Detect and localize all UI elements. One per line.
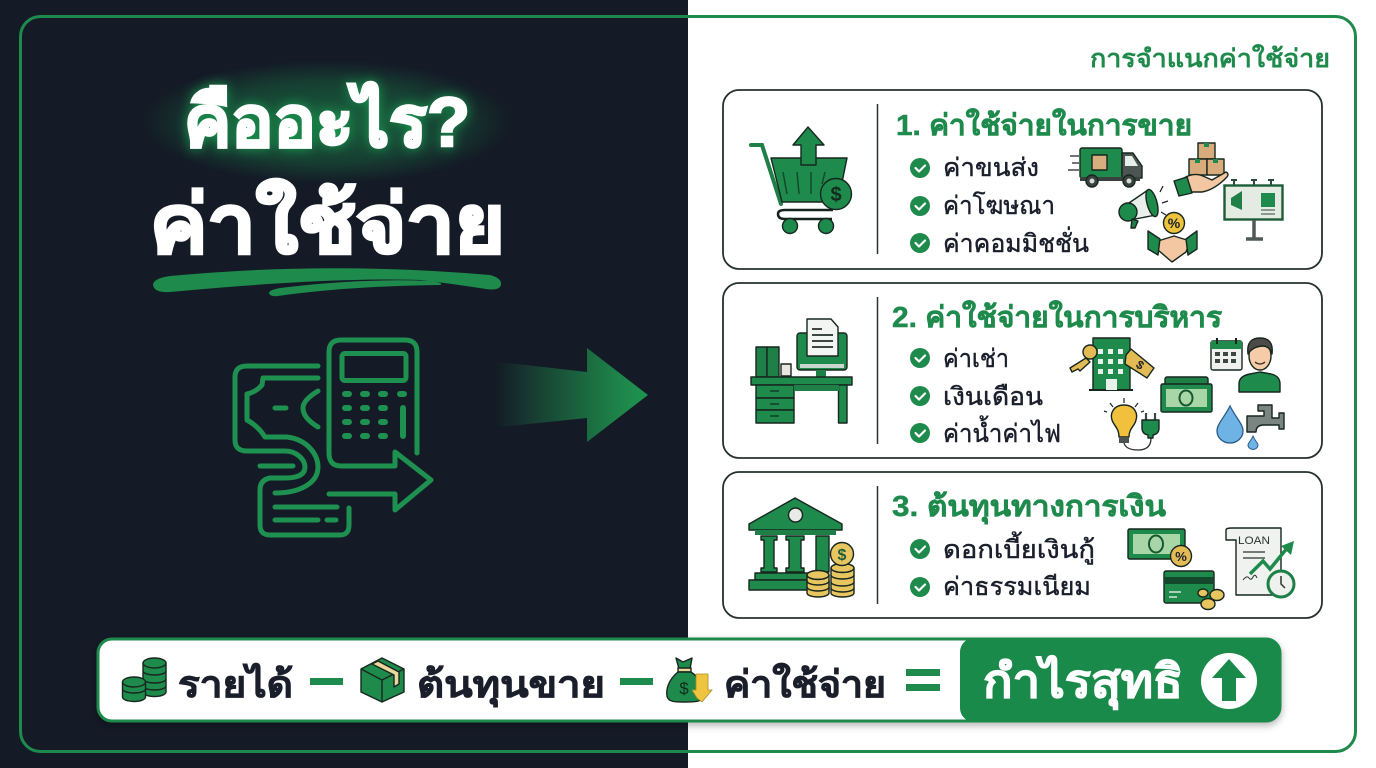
list: section 2 items bbox=[910, 345, 1061, 448]
panel: formula bar bbox=[98, 638, 1280, 722]
icon: credit card with coins bbox=[1164, 571, 1224, 610]
term: cost of sales: ต้นทุนขาย bbox=[417, 664, 605, 708]
icon: loan document bbox=[1226, 528, 1294, 597]
result box: net profit bbox=[960, 638, 1280, 722]
list: section 1 items: ค่าขนส่ง bbox=[943, 154, 1039, 182]
result text: กำไรสุทธิ bbox=[983, 655, 1183, 710]
icon: banknotes bbox=[1161, 377, 1212, 412]
icon: shopping cart bbox=[751, 127, 852, 234]
icon: loan document: LOAN bbox=[1238, 535, 1270, 547]
icon: shopping cart: $ bbox=[830, 184, 842, 206]
term: expenses: ค่าใช้จ่าย bbox=[724, 662, 886, 705]
brush underline bbox=[153, 268, 501, 296]
list: section 1 items: ค่าคอมมิชชั่น bbox=[943, 226, 1089, 258]
panel: financial costs bbox=[723, 472, 1322, 618]
icon: money bag bbox=[667, 658, 712, 702]
title line 2: ค่าใช้จ่าย bbox=[150, 178, 505, 269]
icon: bank with coins bbox=[749, 498, 854, 597]
big arrow bbox=[490, 348, 648, 442]
icon: up arrow circle bbox=[1201, 653, 1257, 709]
icon: office desk bbox=[751, 319, 852, 423]
icon: coin stacks bbox=[122, 658, 166, 702]
panel: administrative expenses bbox=[723, 283, 1322, 458]
icon: cardboard box bbox=[361, 658, 404, 702]
icon: megaphone bbox=[1119, 186, 1168, 228]
term: revenue: รายได้ bbox=[178, 662, 293, 705]
list: section 1 items bbox=[910, 154, 1089, 258]
heading: section 3: 3. ต้นทุนทางการเงิน bbox=[892, 491, 1166, 524]
list: section 3 items: ค่าธรรมเนียม bbox=[943, 573, 1091, 601]
icon: banknote with percent: % bbox=[1175, 549, 1187, 564]
icon: hand with boxes bbox=[1174, 143, 1228, 196]
list: section 3 items: ดอกเบี้ยเงินกู้ bbox=[943, 531, 1095, 565]
icon: water and faucet bbox=[1217, 405, 1284, 450]
icon: bank with coins: $ bbox=[838, 547, 847, 564]
white right background bbox=[688, 0, 1376, 768]
list: section 2 items: ค่าน้ำค่าไฟ bbox=[943, 415, 1061, 448]
equals sign bbox=[906, 669, 940, 691]
icon: building with key and tag bbox=[1070, 338, 1154, 390]
dark left background bbox=[0, 0, 688, 768]
icon: handshake with percent: % bbox=[1168, 215, 1181, 231]
icon: building with key and tag: $ bbox=[1133, 357, 1147, 373]
heading: classification: การจำแนกค่าใช้จ่าย bbox=[1090, 43, 1330, 73]
icon: handshake with percent bbox=[1148, 212, 1197, 262]
list: section 2 items: ค่าเช่า bbox=[943, 345, 1009, 373]
icon: money bag: $ bbox=[679, 679, 689, 698]
list: section 1 items: ค่าโฆษณา bbox=[943, 191, 1055, 220]
minus sign bbox=[310, 678, 343, 685]
list: section 3 items bbox=[910, 531, 1095, 601]
minus sign bbox=[620, 678, 653, 685]
panel: selling expenses bbox=[723, 90, 1322, 269]
heading: section 1: 1. ค่าใช้จ่ายในการขาย bbox=[896, 108, 1192, 142]
title line 1: คืออะไร? bbox=[184, 81, 470, 161]
heading: section 2: 2. ค่าใช้จ่ายในการบริหาร bbox=[892, 300, 1222, 334]
title block bbox=[142, 60, 512, 296]
icon: banknote with percent bbox=[1128, 529, 1192, 566]
icon: employee bbox=[1239, 338, 1280, 392]
icon: delivery truck bbox=[1068, 148, 1142, 187]
icon: light bulb and plug bbox=[1104, 398, 1159, 450]
icon: billboard bbox=[1224, 180, 1282, 239]
list: section 2 items: เงินเดือน bbox=[943, 383, 1043, 411]
icon: money and calculator bbox=[235, 340, 431, 535]
icon: calendar bbox=[1211, 338, 1242, 370]
